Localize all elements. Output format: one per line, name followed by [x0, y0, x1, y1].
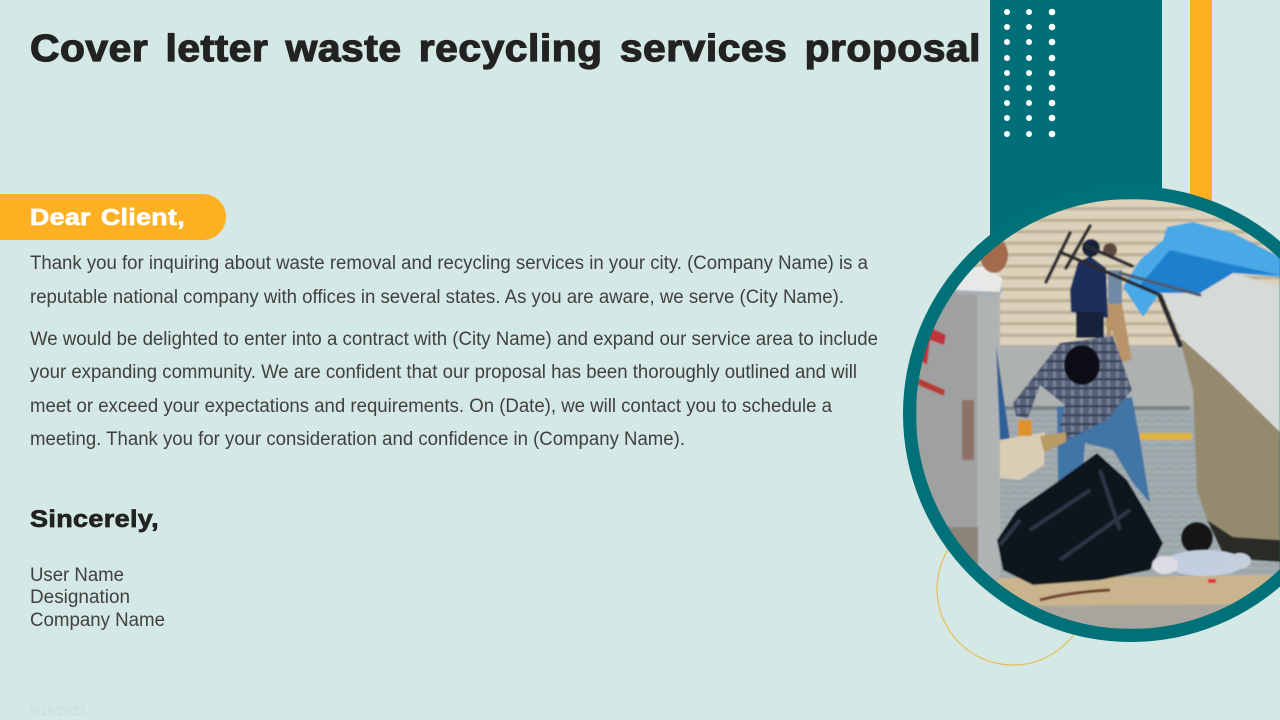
photo: pedestrians	[1070, 239, 1132, 362]
photo: waste collection worker	[916, 199, 1280, 629]
teal decorative block	[990, 0, 1162, 245]
photo: black bag	[997, 453, 1163, 585]
title: Cover letter waste recycling services proposal	[30, 28, 981, 70]
body paragraph 2: We would be delighted to enter into a contract with (City Name) and expand our service area to include	[30, 329, 878, 350]
photo: worker head	[1064, 345, 1100, 385]
photo: gloves and bundle	[1000, 420, 1066, 480]
photo: plastic bottles	[1152, 550, 1251, 576]
body paragraph 1: reputable national company with offices in several states. As you are aware, we serve (City Name).	[30, 287, 844, 308]
dot grid	[1004, 9, 1055, 137]
yellow vertical bar	[1190, 0, 1212, 205]
signature block: Designation	[30, 587, 130, 608]
body paragraph 1	[30, 253, 868, 308]
thin yellow circle outline	[937, 513, 1089, 665]
photo: man behind bin	[955, 237, 1010, 440]
body paragraph 2: meeting. Thank you for your consideration and confidence in (Company Name).	[30, 429, 685, 450]
photo: white sack	[1162, 273, 1280, 432]
photo: cart handles	[1046, 226, 1200, 345]
salutation text: Dear Client,	[30, 204, 185, 230]
body paragraph 2: your expanding community. We are confident that our proposal has been thoroughly outlined and will	[30, 362, 857, 383]
photo: worker shirt	[1013, 336, 1132, 440]
date stamp: 5/19/2023	[30, 704, 85, 718]
salutation pill	[0, 194, 226, 240]
photo: sidewalk	[990, 575, 1280, 629]
sign-off heading: Sincerely,	[30, 506, 159, 533]
photo: blue bag	[1123, 222, 1280, 317]
photo: worker jeans	[1057, 397, 1150, 503]
photo: grey bin	[916, 270, 1003, 580]
photo: stone cart	[1180, 340, 1280, 562]
body paragraph 2: meet or exceed your expectations and requirements. On (Date), we will contact you to schedule a	[30, 396, 832, 417]
photo: street backdrop	[973, 199, 1280, 579]
body paragraph 1: Thank you for inquiring about waste removal and recycling services in your city. (Company Name) is a	[30, 253, 868, 274]
body paragraph 2	[30, 329, 878, 450]
signature block	[30, 565, 165, 631]
teal photo ring	[903, 186, 1280, 642]
signature block: User Name	[30, 565, 124, 586]
signature block: Company Name	[30, 610, 165, 631]
